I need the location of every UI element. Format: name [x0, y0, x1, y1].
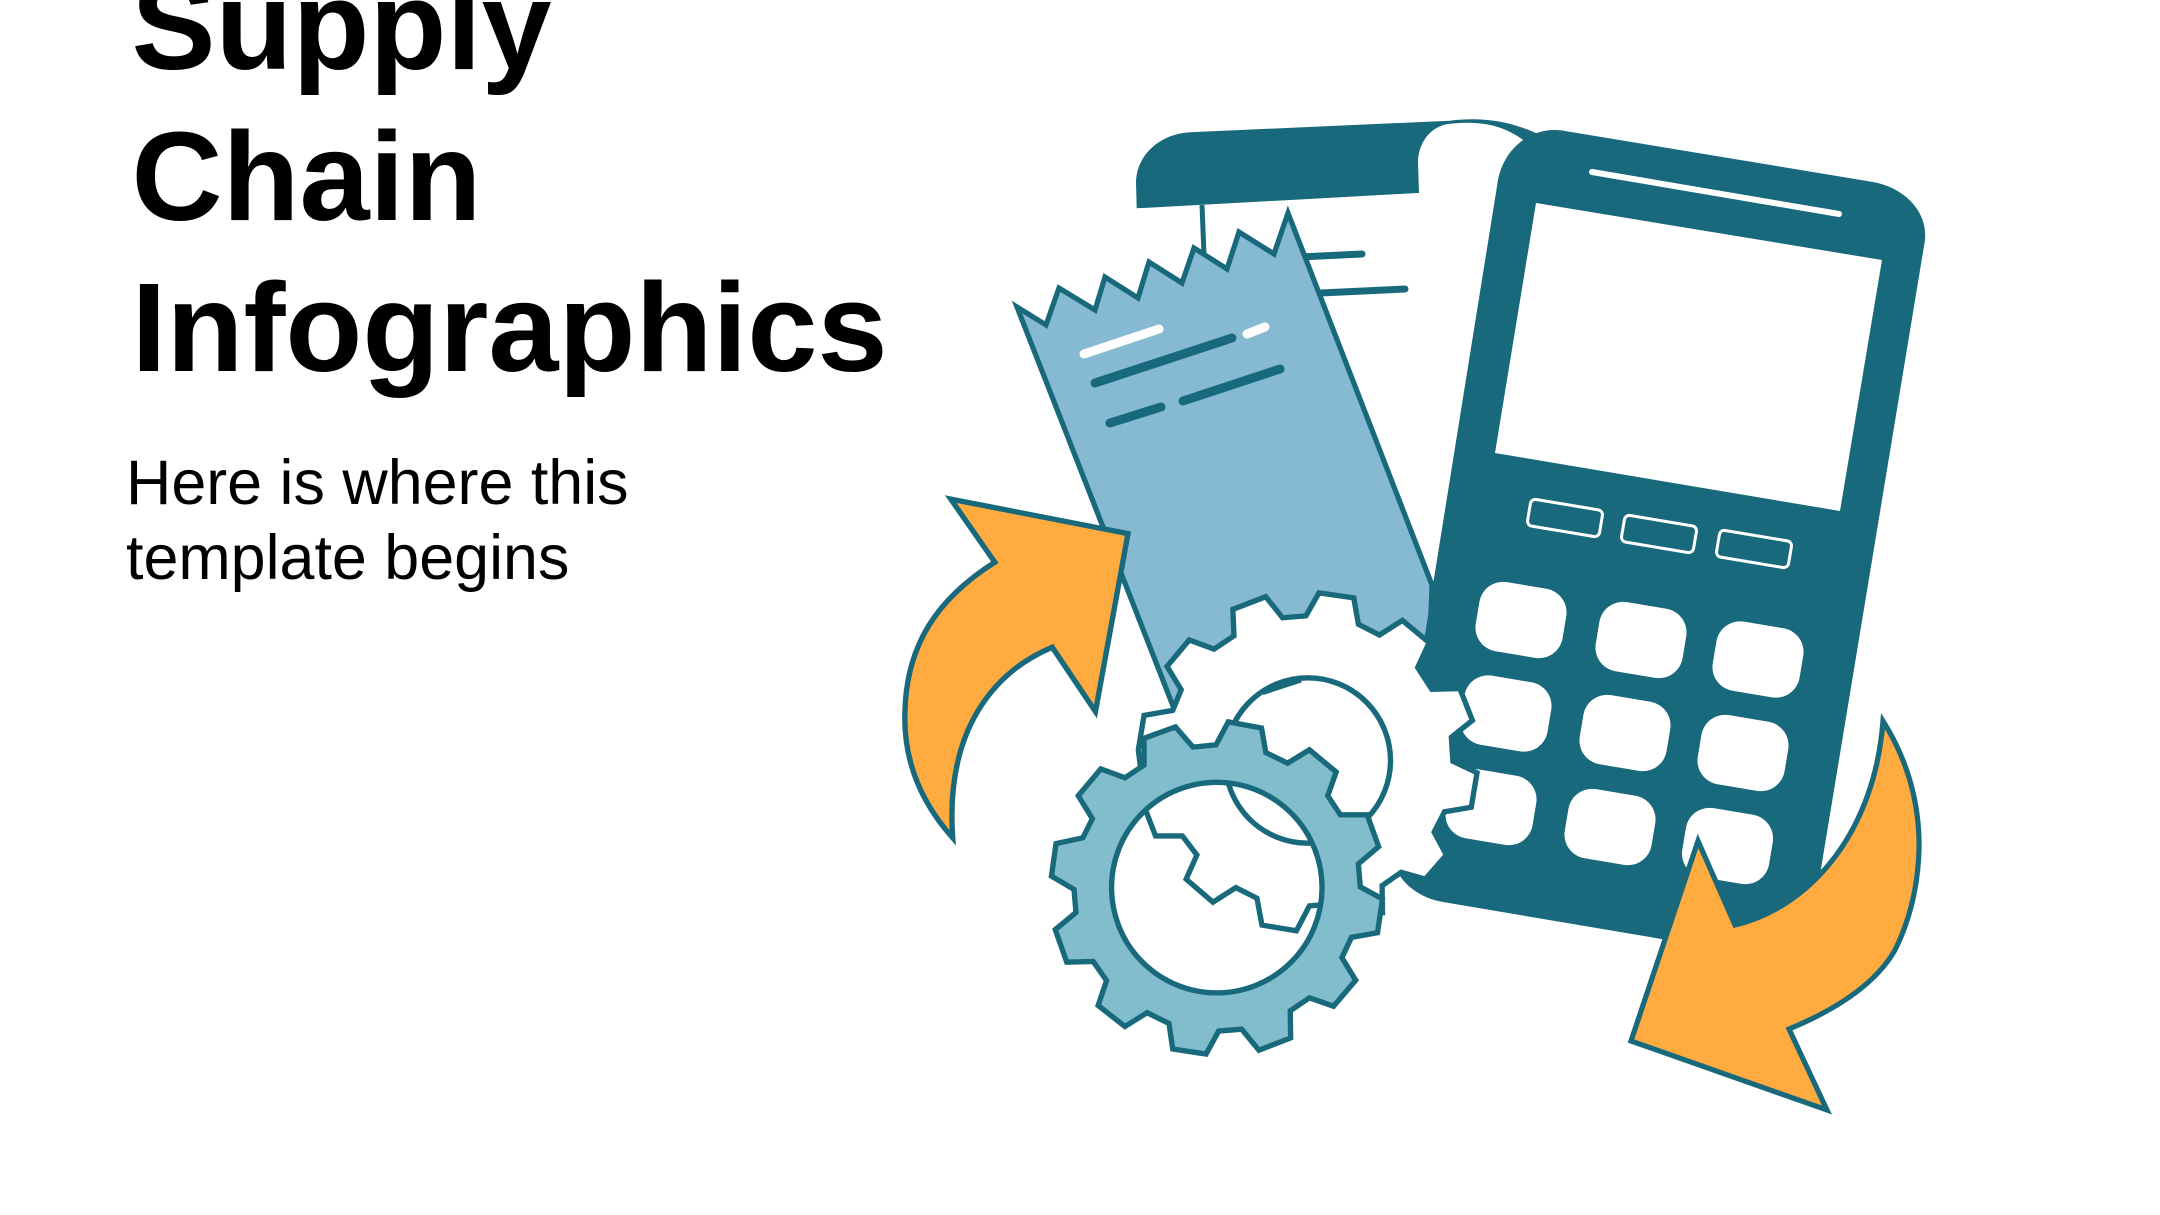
subtitle: Here is where this — [126, 448, 629, 518]
calculator screen — [1495, 203, 1882, 511]
function buttons — [1527, 499, 1792, 568]
title — [132, 0, 888, 398]
title: Chain — [132, 106, 482, 247]
calculator body — [1391, 130, 1925, 955]
title: Infographics — [132, 257, 888, 398]
down arrow — [1631, 721, 1919, 1110]
icon: gears and curved arrow — [905, 499, 1477, 1054]
up arrow — [905, 499, 1128, 838]
blue gear — [1051, 722, 1382, 1054]
icon: calculator — [1391, 130, 1925, 955]
white gear — [1138, 593, 1477, 931]
calculator speaker slot — [1592, 172, 1839, 214]
subtitle — [126, 448, 629, 593]
icon: blue torn receipt — [1017, 213, 1432, 706]
icon: back paper receipt — [1136, 119, 1542, 400]
number keys — [1442, 578, 1807, 888]
subtitle: template begins — [126, 523, 569, 593]
